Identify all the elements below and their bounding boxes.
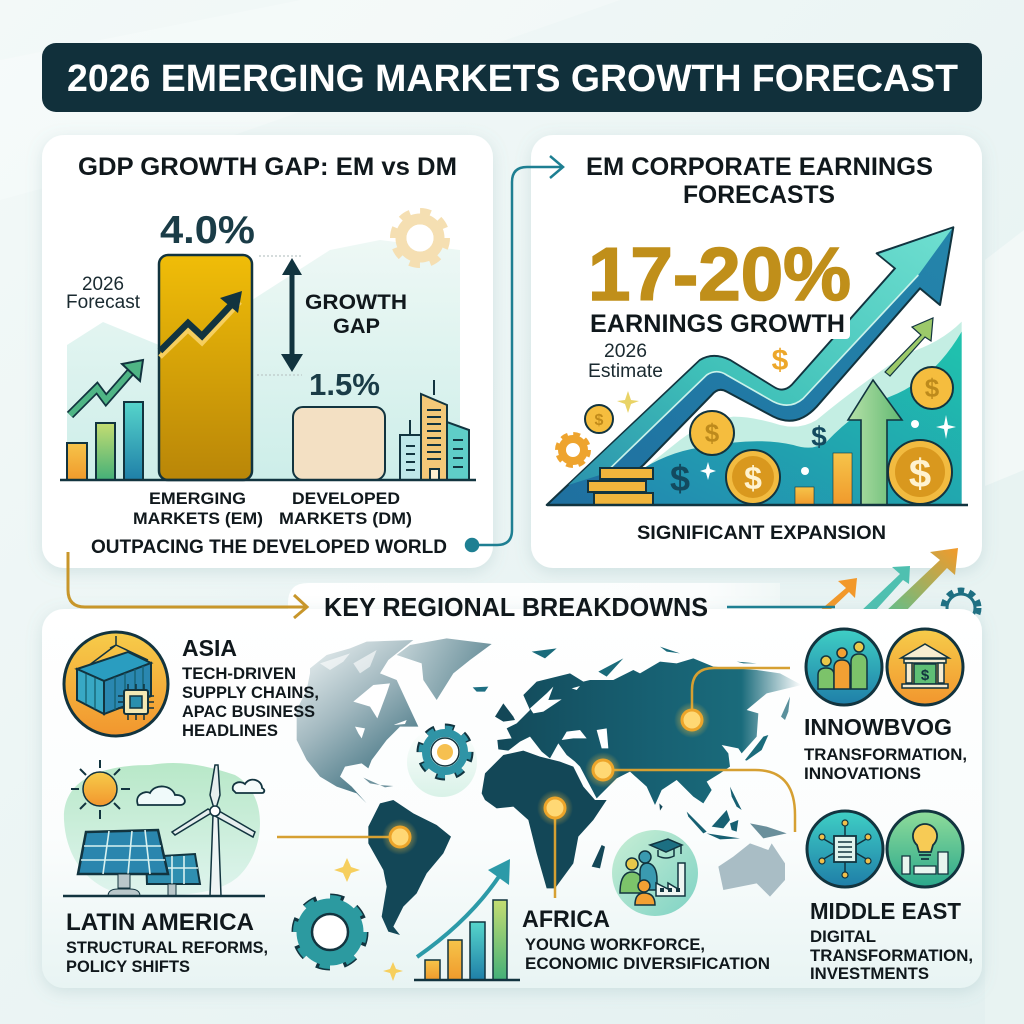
label: Asia: TECH-DRIVEN [182,664,296,683]
label: emerging markets: MARKETS (EM) [133,509,263,528]
label: Asia [182,635,319,740]
chart baseline [60,479,476,481]
icon: circuit [807,811,883,887]
icon: large teal gear [297,899,363,965]
dollar sign: gold: $ [772,344,789,377]
label: Asia: SUPPLY CHAINS, [182,683,319,702]
gear on map [407,727,477,797]
label: 2026 forecast: Forecast [66,292,141,313]
chart background hills [67,240,460,479]
label: Innowbvog: INNOVATIONS [804,764,921,783]
icon: gear behind bottom panel [944,591,978,625]
panel heading: GDP growth gap: GDP GROWTH GAP: EM vs DM [78,153,457,181]
location markers [382,702,710,855]
coins [690,367,953,504]
icon: light bulb and city [887,811,963,887]
region: Innowbvog [804,629,967,783]
islands [495,647,790,868]
label: 2026 estimate [588,341,663,382]
label: Innowbvog: TRANSFORMATION, [804,745,967,764]
label: growth gap: GROWTH [305,291,407,314]
label: Latin America: POLICY SHIFTS [66,957,190,976]
dollar signs: dark: $ [811,421,827,452]
earnings illustration traced layers [547,227,962,505]
continent: Australia [718,843,785,897]
bar chart with teal arrow [414,859,520,980]
dollar signs: dark: $ [670,458,690,499]
main growth arrow [547,227,953,505]
title banner [42,43,982,112]
label: Innowbvog: INNOWBVOG [804,714,952,740]
icon: small coin: $ [595,412,604,429]
label: Middle East: TRANSFORMATION, [810,946,973,965]
label: developed markets: MARKETS (DM) [279,509,412,528]
icon: small coin [585,405,613,433]
chart baseline [547,504,968,506]
label: Latin America: STRUCTURAL REFORMS, [66,938,268,957]
icon: workforce and education [612,830,698,916]
dollar signs: dark [670,421,827,499]
label: emerging markets [133,489,263,528]
panel: corporate earnings [531,135,982,568]
caption: outpacing: OUTPACING THE DEVELOPED WORLD [91,537,447,558]
icon: bank [887,629,963,705]
label: Middle East: MIDDLE EAST [810,898,961,924]
caption: significant expansion: SIGNIFICANT EXPANSION [637,523,886,544]
label: Africa: YOUNG WORKFORCE, [525,935,705,954]
label: Middle East: DIGITAL [810,927,876,946]
panel: GDP growth gap [42,135,493,568]
continent: Greenland [397,638,492,700]
label: Asia: ASIA [182,635,237,661]
small bars [795,453,852,505]
coins: $ [705,418,720,448]
icon: orange gear [558,435,588,465]
coins: $ [909,452,931,496]
bar: developed markets 1.5% [293,407,385,480]
wave light [623,322,962,505]
coin stack [588,468,653,505]
label: Middle East: INVESTMENTS [810,964,929,983]
icon: bank: $ [921,667,930,684]
world map east [482,647,802,897]
icon: container with chip [64,632,168,736]
region: Middle East [807,811,973,983]
heading tab [288,583,780,640]
continent: North America [297,640,418,803]
label: Africa: AFRICA [522,906,610,933]
label: Asia: APAC BUSINESS [182,702,315,721]
label: Africa: ECONOMIC DIVERSIFICATION [525,954,770,973]
label: emerging markets: EMERGING [149,489,246,508]
sparkles white [700,415,956,480]
label: developed markets: DEVELOPED [292,489,400,508]
sparkle [617,391,639,413]
inland seas [530,686,608,748]
growth gap arrow [257,256,303,375]
Caribbean [363,778,393,787]
label: developed markets [279,489,412,528]
coins: $ [744,460,762,496]
sparkles gold [334,858,403,981]
panel heading: earnings forecasts [586,153,933,209]
label: 2026 estimate: 2026 [604,341,647,362]
panel heading: earnings forecasts: EM CORPORATE EARNINGS [586,153,933,181]
continent: South America [368,800,451,935]
label: Africa [522,906,770,973]
panel heading: key regional breakdowns: KEY REGIONAL BREAKDOWNS [324,592,708,622]
value: 4.0%: 4.0% [160,209,255,252]
continent: Africa [482,751,607,888]
arrow: connector to regional heading [68,552,307,618]
decorative growth arrows [818,548,958,612]
coins: $ [925,373,940,403]
value: 17-20%: 17-20% [588,232,851,316]
label: 2026 estimate: Estimate [588,361,663,382]
continent: Eurasia [497,658,802,805]
region: Asia [64,632,319,740]
title banner: 2026 EMERGING MARKETS GROWTH FORECAST [67,58,958,100]
label: Innowbvog [804,714,967,783]
line: heading to growth arrows [727,606,835,608]
label: Latin America: LATIN AMERICA [66,909,254,936]
location connectors [277,668,795,898]
wave dark [620,332,962,505]
region: Africa [522,830,770,973]
illustration: solar and wind [63,760,265,896]
label: Latin America [66,909,268,976]
panel heading: earnings forecasts: FORECASTS [683,181,835,209]
icon: people [806,629,882,705]
icon: city skyline [400,380,469,480]
bar: emerging markets 4.0% [159,255,252,480]
small green arrow [885,318,933,376]
label: growth gap [305,291,407,338]
Hudson Bay and lakes [320,650,407,738]
label: Middle East [810,898,973,983]
label: earnings growth: EARNINGS GROWTH [590,310,845,338]
green up arrow [848,380,902,505]
Iceland [473,687,488,692]
icon: pale gear [394,212,446,264]
label: 2026 forecast [66,274,141,313]
value: 1.5%: 1.5% [309,367,380,402]
region: Latin America [63,760,268,976]
label: 2026 forecast: 2026 [82,274,124,295]
arrow: connector to earnings panel [466,156,563,551]
world map west [297,638,492,935]
small bar chart with green arrow [67,360,143,480]
label: Asia: HEADLINES [182,721,278,740]
panel: regional breakdowns [42,592,982,988]
label: growth gap: GAP [333,315,380,338]
